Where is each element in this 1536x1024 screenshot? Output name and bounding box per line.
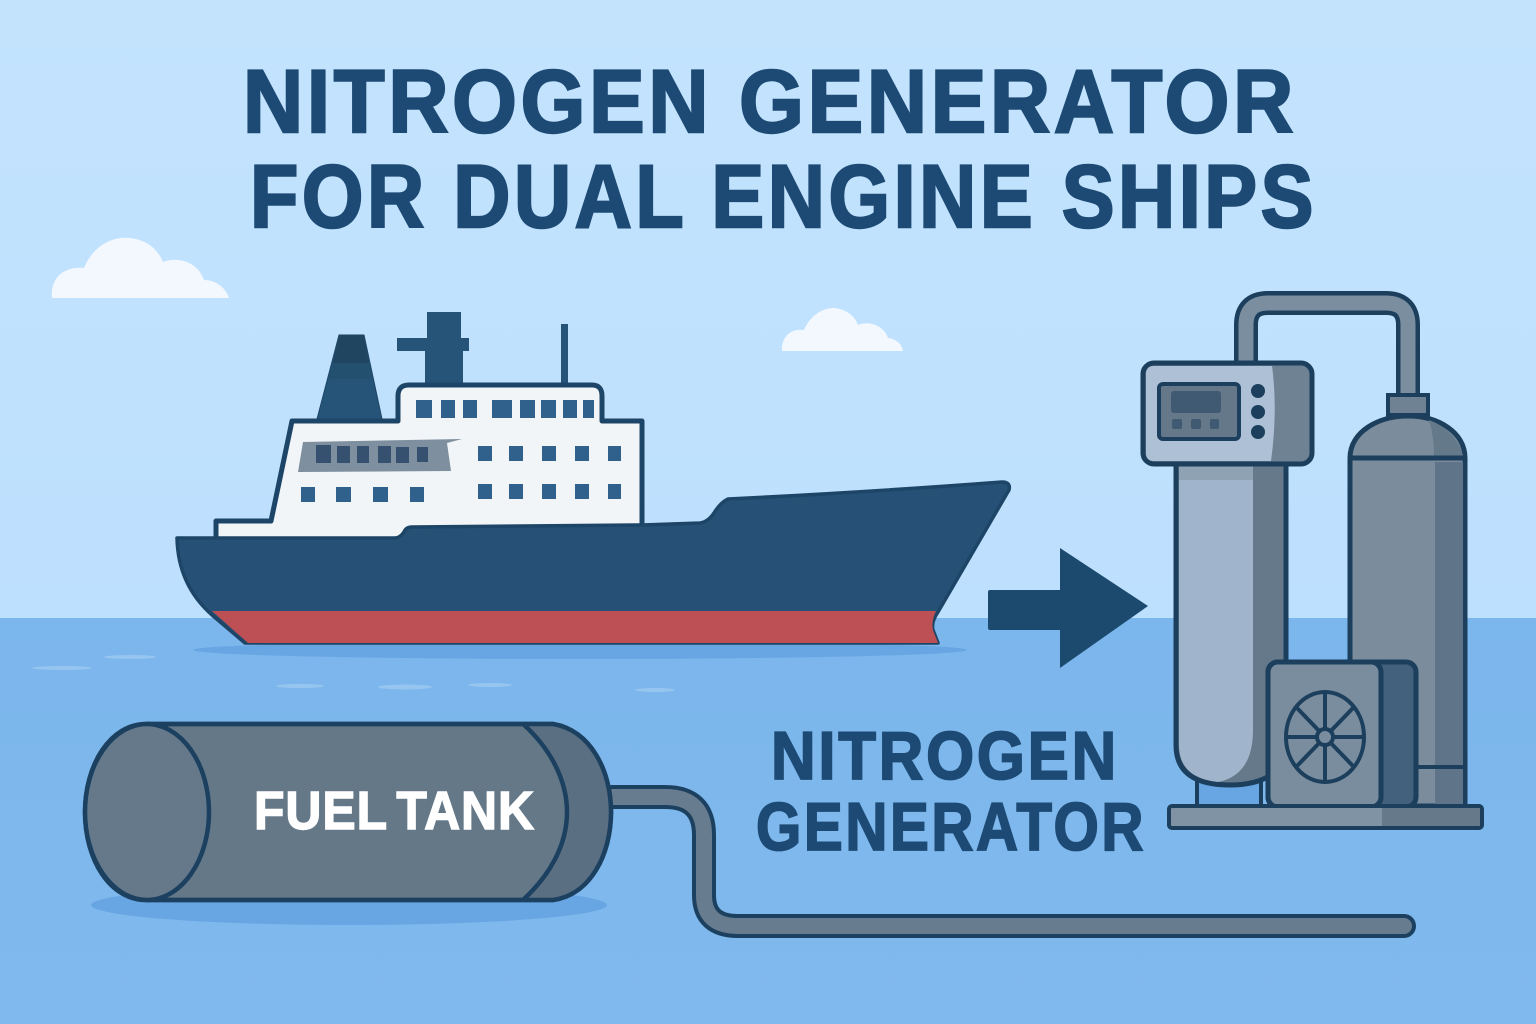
hull (177, 482, 1009, 643)
title (243, 51, 1317, 246)
nitrogen generator (1143, 303, 1482, 828)
sky background (0, 0, 1536, 619)
ship (177, 312, 1009, 643)
red waterline band (212, 611, 938, 643)
label: nitrogen generator: GENERATOR (756, 789, 1146, 865)
fuel tank label: FUEL TANK (254, 781, 535, 841)
label: nitrogen generator (756, 718, 1146, 865)
column tank left (1176, 460, 1286, 807)
connecting pipe (1246, 303, 1408, 396)
tank shadow (91, 885, 607, 925)
fan (1286, 692, 1364, 782)
cloud left (52, 238, 229, 298)
cabin windows (301, 446, 621, 502)
title: NITROGEN GENERATOR (243, 51, 1297, 151)
display screen (1159, 384, 1239, 439)
arrow (988, 548, 1148, 668)
ship shadow (193, 641, 967, 659)
fuel tank (85, 724, 611, 900)
indicator dots (1251, 384, 1265, 439)
bridge window band (298, 439, 462, 472)
funnel (317, 335, 382, 419)
water ripples (32, 655, 675, 692)
cloud right (782, 308, 903, 351)
superstructure (216, 385, 642, 542)
sea background (0, 618, 1536, 1024)
control box (1143, 363, 1312, 464)
label: nitrogen generator: NITROGEN (771, 718, 1119, 794)
fuel pipe (612, 797, 1404, 926)
title: FOR DUAL ENGINE SHIPS (250, 146, 1317, 246)
cylinder tank right (1350, 395, 1465, 806)
base platform (1169, 806, 1482, 828)
mast (397, 312, 568, 384)
upper deck windows (416, 400, 594, 418)
cooler with fan (1268, 662, 1416, 807)
